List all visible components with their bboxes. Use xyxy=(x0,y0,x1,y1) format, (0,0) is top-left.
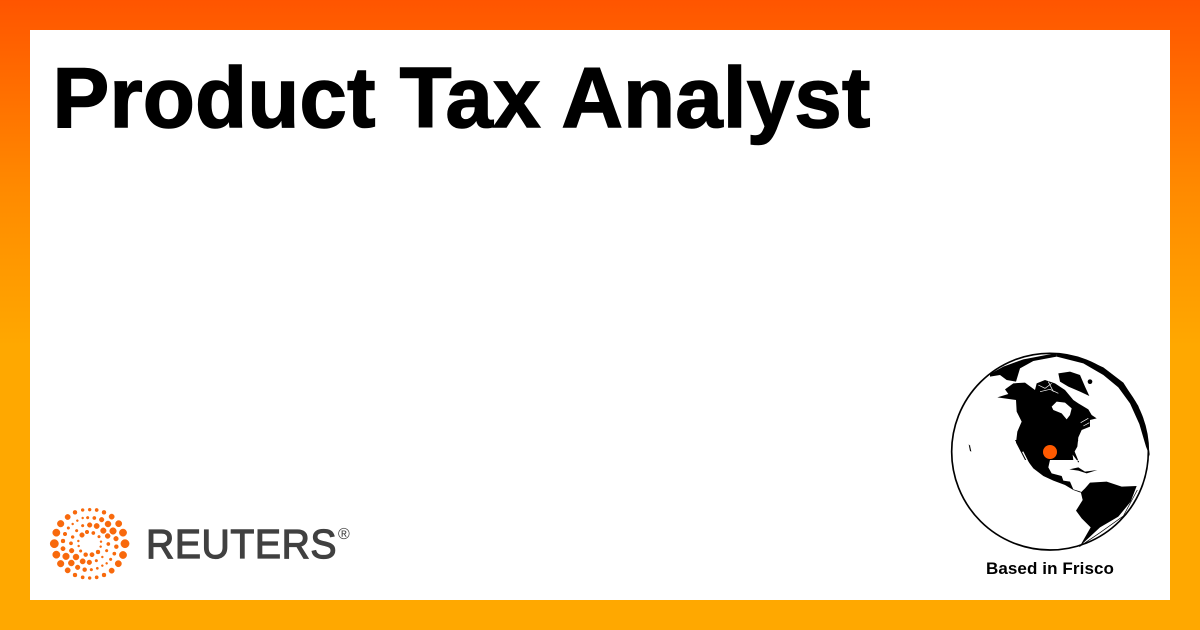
caption: location: Based in Frisco xyxy=(986,559,1114,578)
greenland xyxy=(1058,372,1089,396)
registered mark: ® xyxy=(338,526,350,543)
north america xyxy=(997,380,1097,460)
reuters wordmark: REUTERS xyxy=(146,521,337,567)
caribbean islands xyxy=(1069,467,1097,473)
icon: globe with location marker xyxy=(950,352,1150,551)
location marker xyxy=(1043,445,1057,459)
title: Product Tax Analyst xyxy=(52,51,871,146)
hawaii xyxy=(969,444,971,452)
europe and africa limb xyxy=(1057,353,1150,457)
siberia and arctic rim xyxy=(990,353,1057,382)
mexico central and south america xyxy=(1015,440,1137,546)
icon: reuters logo dots xyxy=(50,508,130,580)
